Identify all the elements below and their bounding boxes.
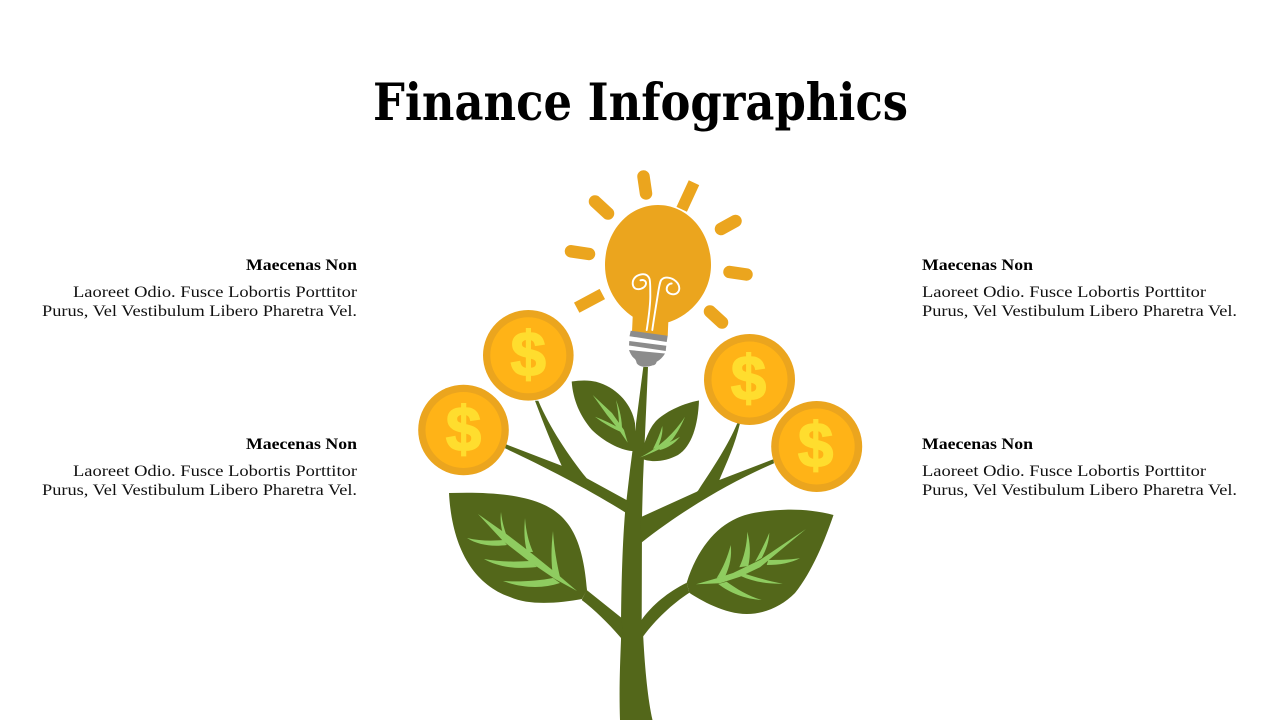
text block: bottom right bbox=[922, 436, 1237, 499]
leaf: large right bbox=[687, 510, 834, 614]
bulb base bbox=[629, 331, 668, 367]
bulb glass bbox=[605, 205, 711, 336]
text block: bottom left: Maecenas Non bbox=[246, 436, 357, 453]
text block: bottom right: Laoreet Odio. Fusce Lobortis Porttitor bbox=[922, 461, 1207, 480]
coin: upper right bbox=[704, 334, 795, 425]
text block: top right: Maecenas Non bbox=[922, 257, 1033, 274]
coin: far right: $ bbox=[798, 411, 833, 481]
coin: lower left bbox=[418, 385, 509, 475]
text block: bottom right: Maecenas Non bbox=[922, 436, 1033, 453]
text block: top right: Laoreet Odio. Fusce Lobortis Porttitor bbox=[922, 282, 1207, 301]
text block: top left bbox=[42, 257, 358, 320]
text block: bottom left: Laoreet Odio. Fusce Lobortis Porttitor bbox=[73, 461, 358, 480]
leaf: small left bbox=[572, 381, 635, 451]
text block: bottom left bbox=[42, 436, 358, 499]
coin: upper left bbox=[483, 310, 574, 401]
text block: top right bbox=[922, 257, 1237, 320]
leaf: large left bbox=[449, 493, 587, 603]
coin: lower left: $ bbox=[446, 395, 481, 465]
bulb filament bbox=[633, 274, 679, 330]
coin: far right bbox=[771, 401, 862, 492]
leaf: small right bbox=[640, 400, 699, 461]
plant stem and branches bbox=[505, 367, 774, 720]
bulb rays bbox=[571, 176, 746, 322]
coin: upper left: $ bbox=[511, 320, 546, 390]
text block: top left: Laoreet Odio. Fusce Lobortis Porttitor bbox=[73, 282, 358, 301]
text block: bottom left: Purus, Vel Vestibulum Libero Pharetra Vel. bbox=[42, 480, 357, 499]
title: Finance Infographics bbox=[373, 73, 908, 133]
coin: upper right: $ bbox=[731, 344, 766, 414]
text block: top right: Purus, Vel Vestibulum Libero Pharetra Vel. bbox=[922, 301, 1237, 320]
icon: light bulb bbox=[571, 176, 746, 367]
text block: top left: Maecenas Non bbox=[246, 257, 357, 274]
text block: bottom right: Purus, Vel Vestibulum Libero Pharetra Vel. bbox=[922, 480, 1237, 499]
text block: top left: Purus, Vel Vestibulum Libero Pharetra Vel. bbox=[42, 301, 357, 320]
